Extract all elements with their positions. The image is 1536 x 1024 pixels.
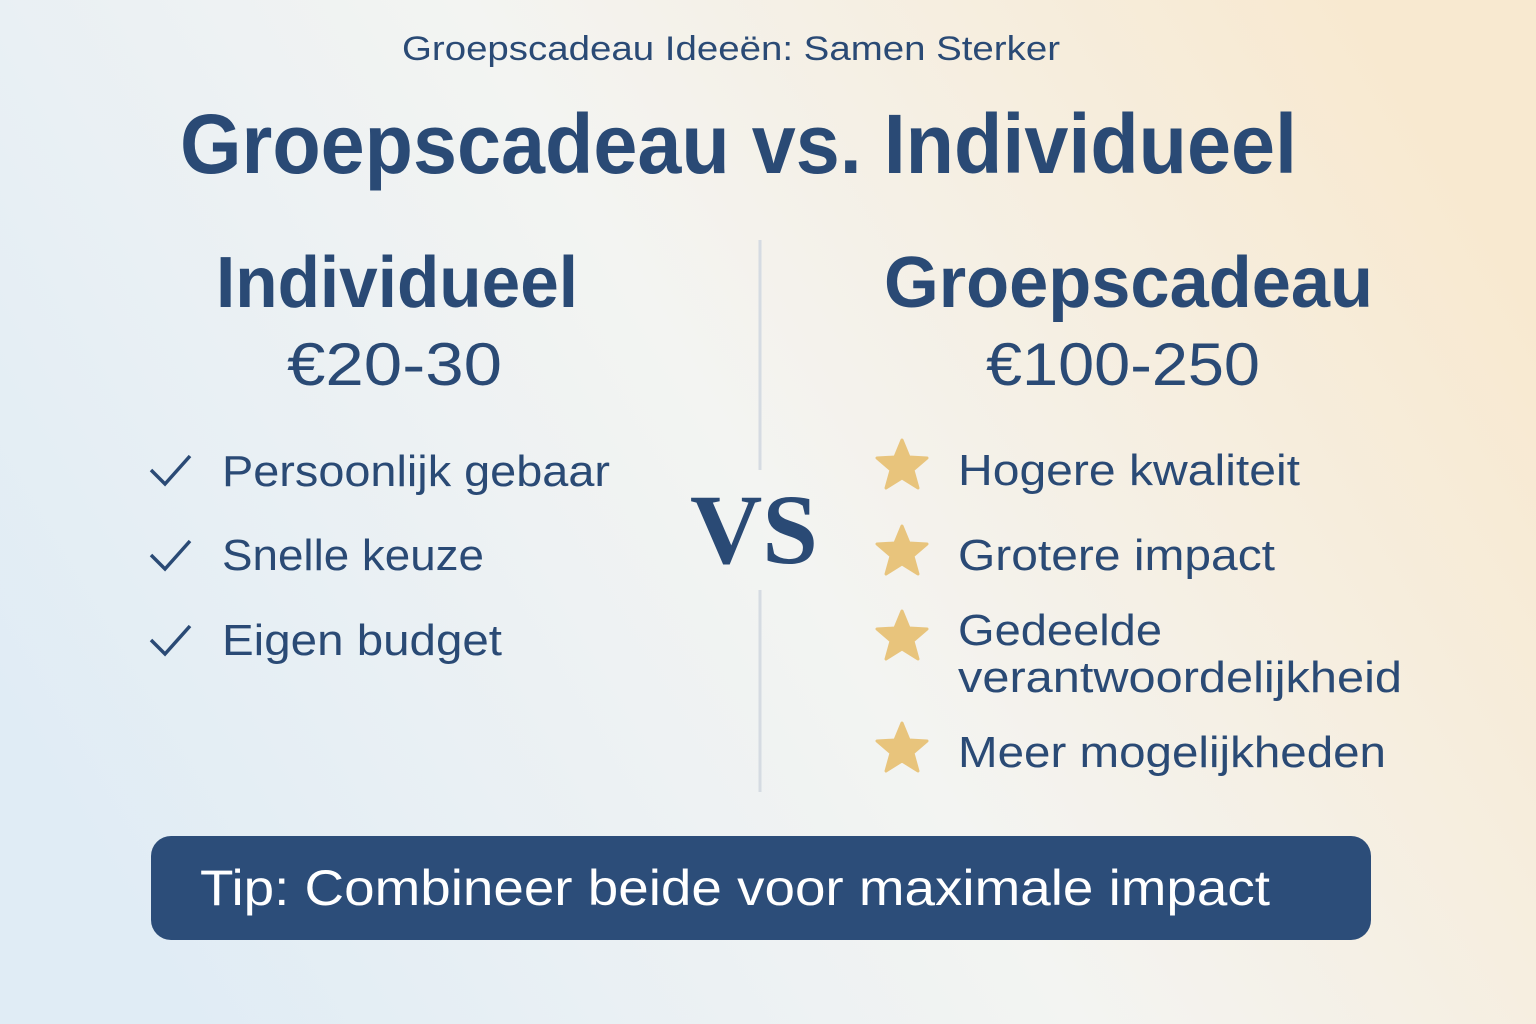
list: groepscadeau benefits: Gedeelde — [958, 606, 1162, 655]
list: groepscadeau benefits: Hogere kwaliteit — [958, 446, 1300, 495]
price: individueel: €20-30 — [287, 331, 502, 398]
list: groepscadeau benefits: Grotere impact — [958, 531, 1275, 580]
list: individueel benefits: Persoonlijk gebaar — [222, 447, 610, 496]
subtitle: Groepscadeau Ideeën: Samen Sterker — [402, 30, 1060, 68]
list: individueel benefits: Snelle keuze — [222, 531, 484, 580]
heading: Groepscadeau: Groepscadeau — [884, 243, 1373, 323]
title: Groepscadeau vs. Individueel — [180, 97, 1297, 191]
panel: groepscadeau — [877, 243, 1402, 777]
vs label: VS — [690, 474, 818, 585]
tip banner — [151, 836, 1371, 940]
list: groepscadeau benefits: verantwoordelijkheid — [958, 653, 1402, 702]
list: groepscadeau benefits: Meer mogelijkheden — [958, 728, 1386, 777]
list: individueel benefits — [151, 447, 610, 665]
list: groepscadeau benefits — [877, 440, 1402, 777]
tip banner: Tip: Combineer beide voor maximale impact — [200, 860, 1270, 916]
panel: individueel — [151, 243, 610, 665]
price: groepscadeau: €100-250 — [986, 331, 1260, 398]
heading: Individueel: Individueel — [216, 243, 578, 323]
list: individueel benefits: Eigen budget — [222, 616, 502, 665]
